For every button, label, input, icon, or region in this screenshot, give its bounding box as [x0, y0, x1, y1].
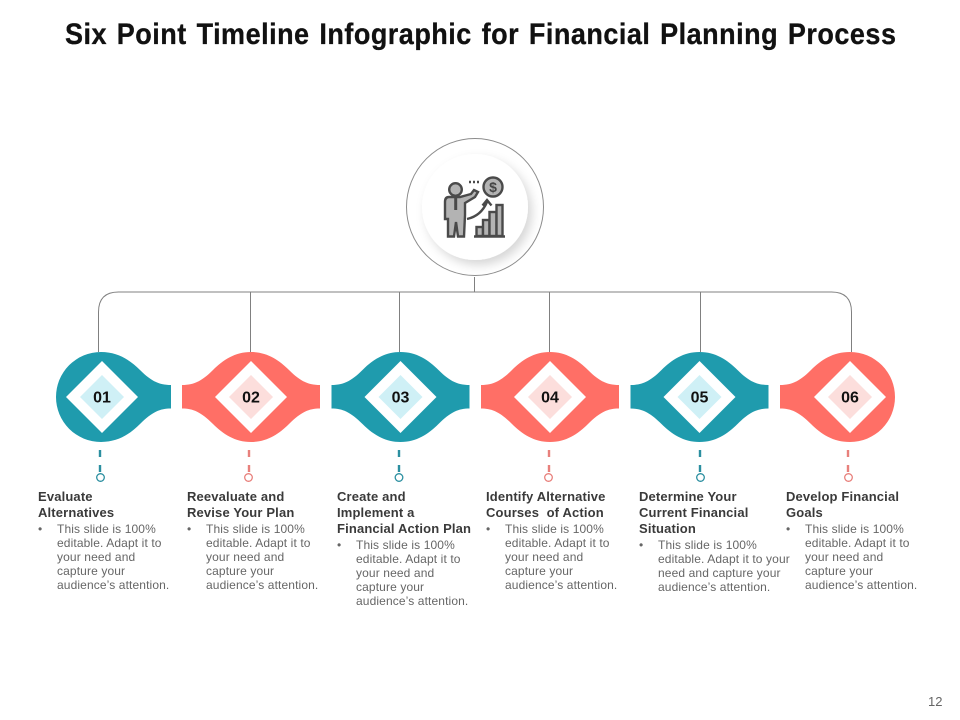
text block 1: editable. Adapt it to: [57, 536, 162, 550]
text block 6: •: [786, 522, 790, 536]
text block 4: Identify Alternative: [486, 489, 606, 504]
page number: 12: [928, 694, 942, 709]
text block 6: audience’s attention.: [805, 578, 917, 592]
text block 5: Situation: [639, 521, 696, 536]
central icon circle: [406, 138, 544, 276]
text block 3: your need and: [356, 566, 434, 580]
text block 2: [187, 489, 318, 592]
text block 3: •: [337, 538, 341, 552]
text block 5: Determine Your: [639, 489, 737, 504]
central icon circle: $: [489, 179, 497, 195]
text block 1: Alternatives: [38, 505, 114, 520]
node 02: 02: [242, 390, 260, 406]
text block 2: audience’s attention.: [206, 578, 318, 592]
text block 3: Implement a: [337, 505, 415, 520]
text block 2: Reevaluate and: [187, 489, 284, 504]
text block 2: This slide is 100%: [206, 522, 305, 536]
text block 6: Develop Financial: [786, 489, 899, 504]
node 04: 04: [541, 390, 559, 406]
node 02: [182, 352, 320, 442]
text block 5: [639, 489, 790, 594]
text block 1: audience’s attention.: [57, 578, 169, 592]
text block 4: capture your: [505, 564, 573, 578]
text block 1: your need and: [57, 550, 135, 564]
text block 3: capture your: [356, 580, 424, 594]
text block 3: Create and: [337, 489, 406, 504]
node 04: [481, 352, 619, 442]
text block 1: This slide is 100%: [57, 522, 156, 536]
dashed markers: [97, 450, 852, 481]
text block 2: Revise Your Plan: [187, 505, 294, 520]
text block 3: [337, 489, 471, 608]
text block 5: Current Financial: [639, 505, 748, 520]
text block 4: audience’s attention.: [505, 578, 617, 592]
text block 5: editable. Adapt it to your: [658, 552, 790, 566]
text block 2: editable. Adapt it to: [206, 536, 311, 550]
text block 3: audience’s attention.: [356, 594, 468, 608]
text block 4: This slide is 100%: [505, 522, 604, 536]
node 01: [56, 352, 171, 442]
text block 5: need and capture your: [658, 566, 781, 580]
text block 4: •: [486, 522, 490, 536]
text block 5: This slide is 100%: [658, 538, 757, 552]
text block 4: [486, 489, 617, 592]
text block 4: editable. Adapt it to: [505, 536, 610, 550]
text block 6: [786, 489, 917, 592]
text block 4: your need and: [505, 550, 583, 564]
text block 5: audience’s attention.: [658, 580, 770, 594]
text block 2: capture your: [206, 564, 274, 578]
node 03: [332, 352, 470, 442]
text block 3: This slide is 100%: [356, 538, 455, 552]
text block 6: This slide is 100%: [805, 522, 904, 536]
text block 1: Evaluate: [38, 489, 93, 504]
node 03: 03: [392, 390, 410, 406]
node 05: [630, 352, 768, 442]
text block 6: editable. Adapt it to: [805, 536, 910, 550]
text block 3: editable. Adapt it to: [356, 552, 461, 566]
text block 6: capture your: [805, 564, 873, 578]
text block 1: capture your: [57, 564, 125, 578]
node 06: 06: [841, 390, 859, 406]
text block 4: Courses of Action: [486, 505, 604, 520]
text block 2: your need and: [206, 550, 284, 564]
text block 2: •: [187, 522, 191, 536]
text block 1: •: [38, 522, 42, 536]
text block 3: Financial Action Plan: [337, 521, 471, 536]
text block 1: [38, 489, 169, 592]
node 06: [780, 352, 895, 442]
text block 5: •: [639, 538, 643, 552]
node 05: 05: [691, 390, 708, 406]
node 01: 01: [93, 390, 111, 406]
icon: presenter with dollar and growth chart: [445, 178, 505, 236]
connector lines: [98, 277, 852, 352]
text block 6: your need and: [805, 550, 883, 564]
text block 6: Goals: [786, 505, 823, 520]
title: Six Point Timeline Infographic for Financial Planning Process: [65, 18, 896, 51]
